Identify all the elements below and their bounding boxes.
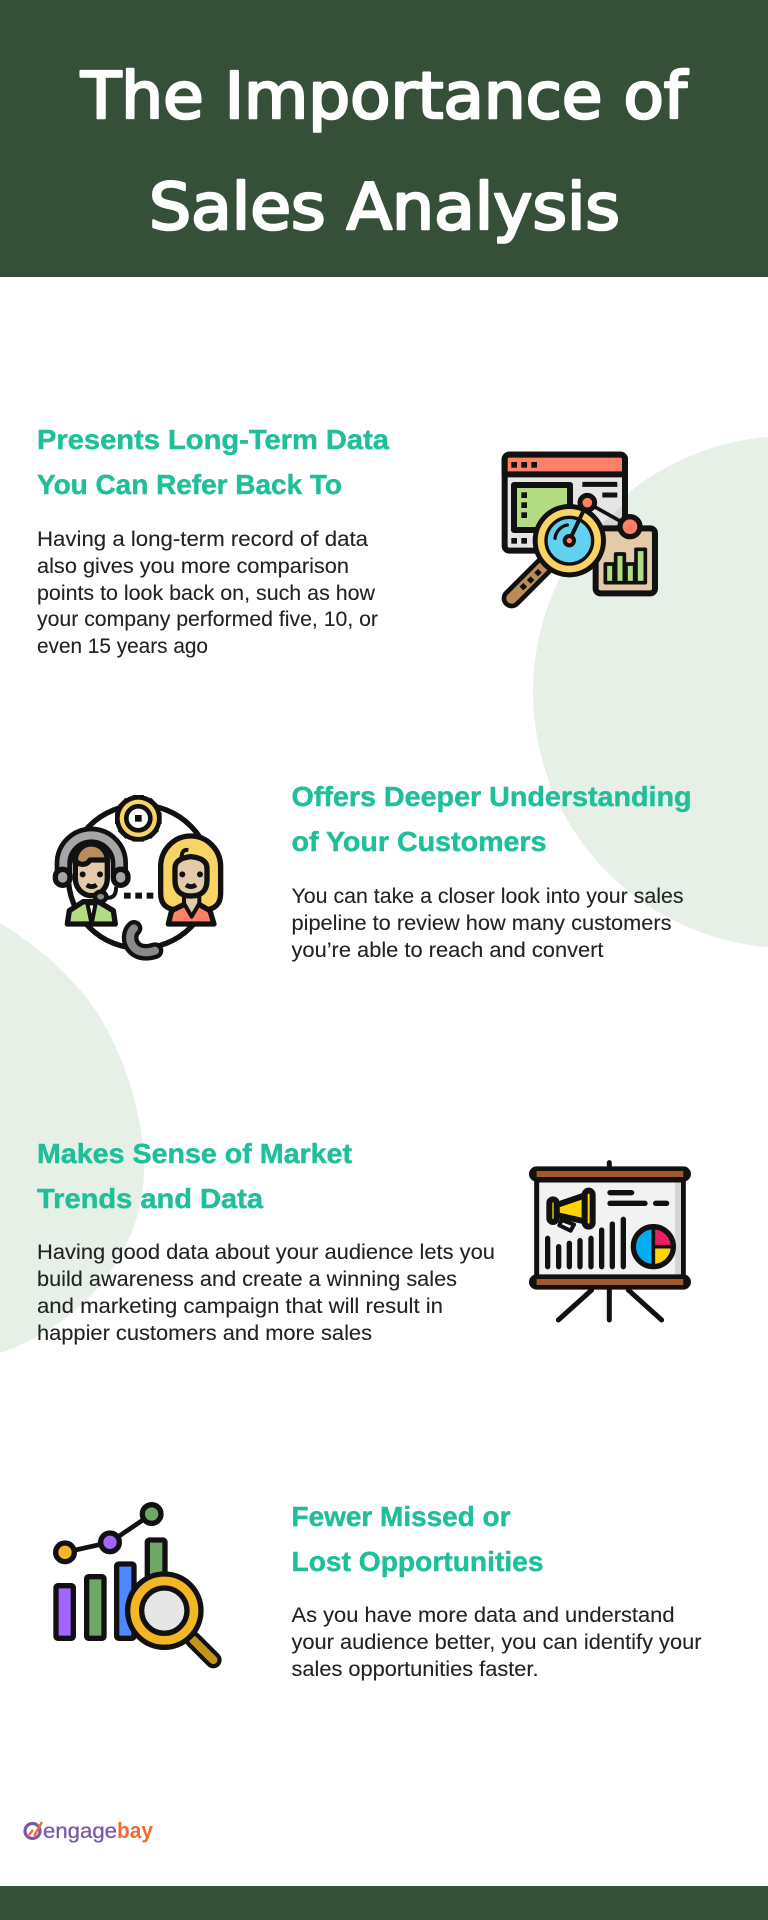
text: market trends: and marketing campaign that will result in: [37, 1295, 443, 1318]
heading: customers: [292, 781, 692, 857]
logo: engagebay: engage: [43, 1820, 117, 1843]
icon: dashboard with magnifier: [505, 455, 655, 598]
text: missed opportunities: [292, 1604, 702, 1681]
heading: market trends: Makes Sense of Market: [37, 1138, 352, 1169]
heading: missed opportunities: Lost Opportunities: [292, 1546, 544, 1577]
panel: long-term data: [37, 424, 655, 658]
icon: presentation board: [537, 1163, 683, 1320]
footer band: [0, 1886, 768, 1920]
text: long-term data: points to look back on, such as how: [37, 582, 376, 605]
text: missed opportunities: As you have more data and understand: [292, 1604, 674, 1627]
text: customers: you’re able to reach and convert: [292, 939, 604, 962]
text: customers: pipeline to review how many customers: [292, 912, 672, 935]
title: Sales Analysis: [149, 171, 620, 245]
text: long-term data: Having a long-term record of data: [37, 528, 368, 551]
text: long-term data: also gives you more comparison: [37, 555, 349, 578]
text: market trends: [37, 1241, 495, 1345]
heading: long-term data: [37, 424, 389, 500]
heading: customers: of Your Customers: [292, 826, 546, 857]
pie chart: [633, 1227, 673, 1267]
text: long-term data: [37, 528, 378, 658]
heading: missed opportunities: [292, 1501, 544, 1577]
title: [80, 60, 689, 245]
text: customers: [292, 885, 684, 962]
icon: customers cycle: [55, 795, 221, 952]
text: long-term data: even 15 years ago: [37, 635, 208, 658]
logo: engagebay: [25, 1818, 154, 1843]
megaphone: [549, 1191, 593, 1231]
heading: long-term data: You Can Refer Back To: [37, 469, 342, 500]
icon: chart with magnifier: [56, 1505, 213, 1660]
logo: engagebay: bay: [117, 1818, 154, 1843]
text: customers: You can take a closer look into your sales: [292, 885, 684, 908]
text: long-term data: your company performed five, 10, or: [37, 608, 378, 631]
text: missed opportunities: sales opportunities faster.: [292, 1658, 538, 1681]
gear: [115, 795, 162, 842]
header band with title: [0, 0, 768, 277]
text: market trends: Having good data about your audience lets you: [37, 1241, 495, 1264]
heading: missed opportunities: Fewer Missed or: [292, 1501, 511, 1532]
panel: missed opportunities: [56, 1501, 701, 1681]
title: The Importance of: [80, 60, 689, 134]
panel: market trends: [37, 1138, 683, 1345]
text: missed opportunities: your audience better, you can identify your: [292, 1631, 702, 1654]
heading: customers: Offers Deeper Understanding: [292, 781, 692, 812]
text: market trends: build awareness and create a winning sales: [37, 1268, 457, 1291]
panel: customers: [55, 781, 691, 962]
text: market trends: happier customers and more sales: [37, 1322, 372, 1345]
heading: long-term data: Presents Long-Term Data: [37, 424, 389, 455]
heading: market trends: [37, 1138, 352, 1214]
heading: market trends: Trends and Data: [37, 1183, 263, 1214]
